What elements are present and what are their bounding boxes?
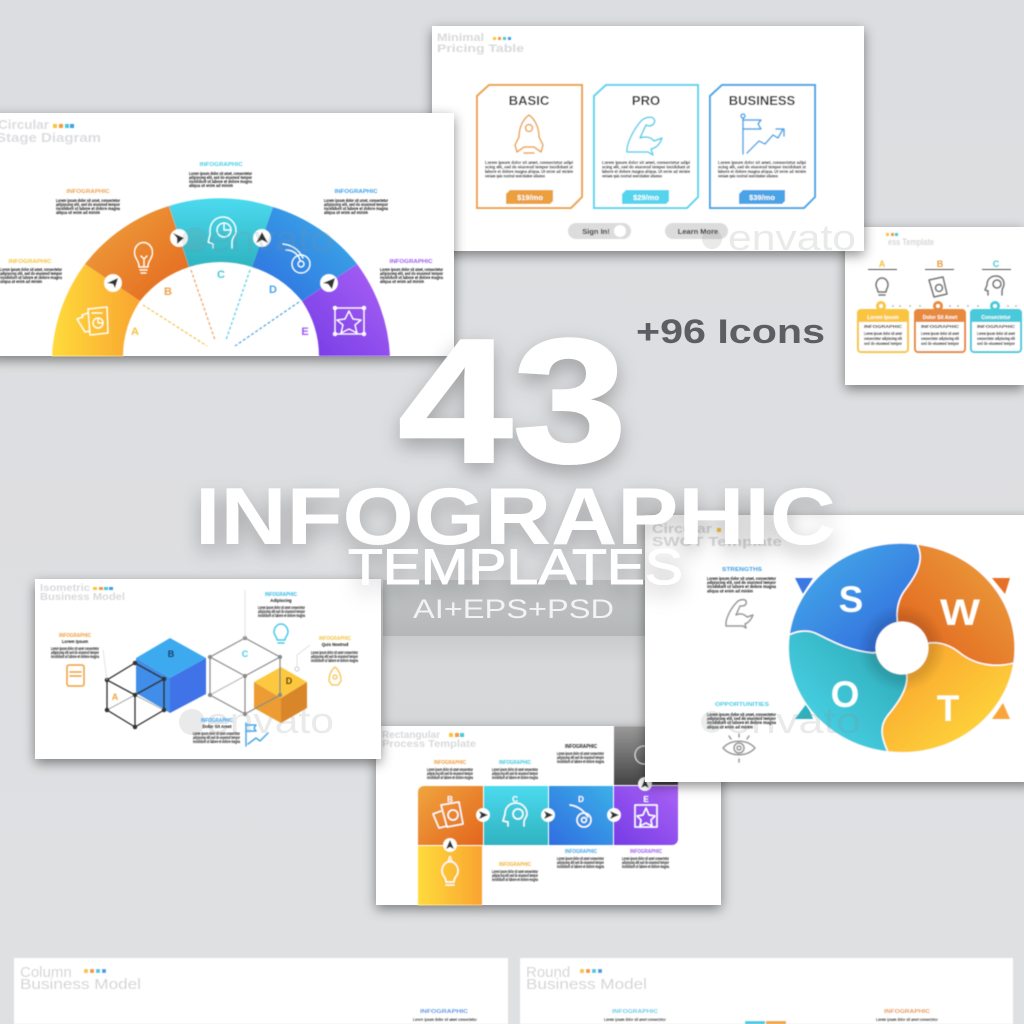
callout: bottom: incididunt ut labore et dolore magna	[193, 739, 240, 744]
text: stage A: incididunt ut labore et dolore magna	[0, 275, 63, 280]
text: strengths: incididunt ut labore et dolore magna	[707, 584, 777, 589]
callout: left: INFOGRAPHIC	[59, 633, 91, 639]
text: stage E: incididunt ut labore et dolore magna	[380, 275, 444, 280]
text: stage C: adipiscing elit, sed do eiusmod tempor	[189, 175, 252, 180]
stage letters: A	[131, 326, 139, 338]
icon: eye	[723, 734, 755, 762]
callout: bottom	[193, 718, 268, 746]
text: process labels: incididunt ut labore et dolore magna	[492, 877, 538, 882]
text: process labels: adipiscing elit sed do eiusmod tempor	[492, 873, 538, 878]
callout: right: incididunt ut labore et dolore magna	[311, 658, 358, 663]
cube letters: C	[242, 649, 249, 659]
label: +96 icons: +96 Icons	[636, 313, 825, 351]
text: stage B: adipiscing elit, sed do eiusmod tempor	[56, 202, 120, 207]
stage letters: C	[217, 269, 225, 281]
text: opportunities: aliqua ut enim ad minim	[707, 724, 753, 730]
process cell B	[418, 786, 483, 845]
arrow markers	[104, 229, 338, 292]
callout: left: Lorem ipsum dolor sit amet consectetur	[51, 646, 99, 651]
text: stage D: INFOGRAPHIC	[334, 189, 378, 195]
text: process labels: Lorem ipsum dolor sit amet consectetur	[557, 751, 604, 756]
column A: Lorem ipsum dolor sit amet	[864, 331, 902, 336]
cube letters: B	[168, 649, 175, 659]
button: sign in	[568, 223, 631, 239]
watermark: envato: envato	[728, 217, 856, 258]
callout: right: Quis Nostrud	[322, 642, 349, 647]
text: process labels: adipiscing elit sed do eiusmod tempor	[557, 755, 604, 760]
text: strengths: Lorem ipsum dolor sit amet, consectetur	[707, 576, 776, 581]
callout: right	[295, 636, 358, 685]
panel: column business model	[14, 958, 508, 1024]
column B: Lorem ipsum dolor sit amet	[921, 331, 959, 336]
process cell E: E	[643, 795, 649, 804]
card: basic: Lorem ipsum dolor sit amet, consectetur adipi	[485, 160, 573, 165]
card: basic: BASIC	[509, 93, 550, 108]
card: pro	[594, 85, 698, 208]
text: stage D: incididunt ut labore et dolore magna	[324, 206, 389, 211]
text: process labels: Lorem ipsum dolor sit amet consectetur	[622, 856, 669, 861]
heading: swot	[652, 521, 782, 549]
text: process labels: incididunt ut labore et dolore magna	[492, 775, 538, 780]
text: strengths: adipiscing elit, sed do eiusmod tempor	[707, 580, 776, 585]
panel: circular SWOT template	[645, 515, 1024, 782]
process cell C: C	[512, 795, 518, 804]
card: business: BUSINESS	[729, 93, 796, 108]
heading: rectangular process	[382, 730, 476, 750]
callout: top: Adipiscing	[270, 598, 292, 603]
callout: top: INFOGRAPHIC	[265, 592, 297, 598]
callout: bottom: adipiscing elit sed do eiusmod tempor	[193, 735, 240, 740]
heading: rectangular process: Rectangular	[382, 730, 440, 741]
text: process labels: Lorem ipsum dolor sit amet consectetur	[492, 869, 538, 874]
watermark: envato: envato	[206, 700, 334, 741]
heading: isometric: Business Model	[40, 592, 125, 603]
heading: pricing: Minimal	[437, 32, 484, 44]
SWOT letters: S	[839, 579, 863, 620]
number: 43: 43	[398, 302, 627, 500]
callout: top: Lorem ipsum dolor sit amet consectetur	[258, 605, 305, 610]
column C: Consectetur	[981, 315, 1011, 321]
heading: templates: TEMPLATES	[348, 539, 683, 595]
text: process labels: Lorem ipsum dolor sit amet consectetur	[427, 767, 473, 772]
column B	[915, 259, 965, 352]
text: stage D: Lorem ipsum dolor sit amet, consectetur	[324, 198, 388, 203]
chart top fragment	[745, 1021, 786, 1024]
text: process labels: adipiscing elit sed do eiusmod tempor	[427, 771, 473, 776]
label: infographic teal: INFOGRAPHIC	[612, 1009, 658, 1015]
text: stage C: aliqua ut enim ad minim	[189, 183, 233, 188]
text: stage A: Lorem ipsum dolor sit amet, consectetur	[0, 267, 62, 272]
column B: consectetur adipiscing elit	[921, 336, 959, 341]
segment A	[52, 264, 140, 356]
price tag: $39/mo	[749, 193, 775, 202]
subheading: formats: AI+EPS+PSD	[413, 594, 614, 624]
column A: INFOGRAPHIC	[864, 324, 902, 329]
stage chart: half ring	[52, 198, 390, 356]
card: pro: labore et dolore magna aliqua. Ut enim ad minim	[602, 169, 690, 174]
text: process labels: adipiscing elit sed do eiusmod tempor	[557, 860, 604, 865]
panel: circular stage diagram	[0, 113, 454, 356]
segment B	[85, 206, 189, 301]
centre hole	[876, 622, 928, 674]
text: process labels: INFOGRAPHIC	[499, 760, 531, 766]
watermark: envato: envato	[726, 700, 861, 741]
column C: C	[993, 259, 1000, 269]
label: infographic	[413, 1009, 477, 1022]
text: stage E	[380, 259, 444, 284]
arrow markers	[443, 777, 652, 852]
text: stage B: incididunt ut labore et dolore magna	[56, 206, 121, 211]
text: opportunities: incididunt ut labore et dolore magna	[707, 720, 777, 725]
card: business: Lorem ipsum dolor sit amet, consectetur adipi	[718, 160, 806, 165]
icon: bulb	[274, 624, 288, 643]
icon: star in frame	[334, 306, 366, 336]
icon: comet	[570, 805, 591, 827]
panel: round business model	[520, 958, 1013, 1024]
icon: head	[985, 276, 1004, 295]
cube B: solid blue	[136, 638, 206, 713]
process cell D	[549, 786, 613, 845]
column A: consectetur adipiscing elit	[864, 336, 902, 341]
heading: round business model	[526, 964, 647, 993]
icon: documents	[929, 277, 947, 297]
button: learn more	[665, 223, 728, 239]
card: business	[710, 85, 815, 208]
watermark: envato	[179, 700, 334, 741]
text: process labels: Lorem ipsum dolor sit amet consectetur	[492, 767, 538, 772]
segment T	[882, 643, 1014, 753]
process cell A: A	[447, 855, 453, 864]
text: stage B: aliqua ut enim ad minim	[56, 210, 100, 215]
icon: rocket	[329, 667, 341, 685]
text: process labels: incididunt ut labore et dolore magna	[427, 775, 473, 780]
panel: process template	[845, 227, 1024, 385]
icon: flag and growth	[246, 723, 268, 746]
text: strengths: STRENGTHS	[722, 567, 763, 573]
column A: Lorem Ipsum	[867, 315, 899, 321]
text: process labels: INFOGRAPHIC	[630, 849, 662, 855]
triangle accents	[795, 578, 1010, 719]
icon: muscle arm	[627, 117, 662, 155]
icon: star	[635, 805, 657, 827]
icon: document	[67, 665, 84, 686]
label: infographic orange: Lorem ipsum dolor sit amet consectetur	[876, 1017, 938, 1022]
stage letters: E	[301, 326, 309, 338]
heading: pricing: Pricing Table	[437, 43, 524, 55]
heading: isometric: Isometric	[40, 583, 90, 594]
heading: pricing	[437, 32, 524, 55]
connector dots	[892, 305, 1017, 307]
text: stage C: INFOGRAPHIC	[200, 162, 243, 168]
heading: infographic: INFOGRAPHIC	[195, 472, 836, 562]
callout: left: incididunt ut labore et dolore magna	[51, 654, 99, 659]
button: sign in: Sign In!	[582, 227, 610, 236]
callout: bottom: Lorem ipsum dolor sit amet consectetur	[193, 731, 240, 736]
heading: circular stage	[0, 117, 101, 145]
cube C: wireframe	[208, 636, 282, 716]
label: infographic orange	[876, 1009, 938, 1022]
callout: right: INFOGRAPHIC	[319, 636, 351, 642]
panel: isometric business model	[35, 579, 381, 759]
text: process labels: incididunt ut labore et dolore magna	[557, 864, 604, 869]
text: stage C	[189, 162, 253, 188]
callout: top: adipiscing elit sed do eiusmod tempor	[258, 609, 305, 614]
process cell C	[484, 786, 548, 845]
text: opportunities: adipiscing elit, sed do eiusmod tempor	[707, 716, 776, 721]
text: process labels: adipiscing elit sed do eiusmod tempor	[492, 771, 538, 776]
column B: INFOGRAPHIC	[921, 324, 959, 329]
card: business: scing elit, sed do eiusmod tempor incididunt ut	[718, 164, 807, 170]
column C	[971, 259, 1021, 352]
text: process labels	[427, 744, 669, 882]
text: process labels: INFOGRAPHIC	[565, 849, 597, 855]
text: process labels: INFOGRAPHIC	[565, 744, 597, 750]
text: stage A: INFOGRAPHIC	[8, 259, 52, 265]
text: process labels: adipiscing elit sed do eiusmod tempor	[622, 860, 669, 865]
card: basic	[477, 85, 582, 208]
process cell A	[418, 846, 482, 905]
callout: left: Lorem Ipsum	[62, 639, 88, 644]
text: process labels: incididunt ut labore et dolore magna	[557, 759, 604, 764]
text: process labels: Lorem ipsum dolor sit amet consectetur	[557, 856, 604, 861]
text: stage C: incididunt ut labore et dolore magna	[189, 179, 253, 184]
text: process labels: INFOGRAPHIC	[499, 862, 531, 868]
cube D: solid orange	[254, 667, 307, 723]
heading: process template: ess Template	[888, 237, 934, 247]
icon: flag and growth arrow	[741, 114, 784, 154]
label: infographic orange: INFOGRAPHIC	[884, 1009, 930, 1015]
icon: head	[503, 803, 527, 826]
SWOT letters	[831, 579, 980, 729]
callout: left	[51, 633, 107, 686]
segment W	[897, 544, 1015, 665]
process cell E	[614, 786, 678, 845]
text: opportunities: Lorem ipsum dolor sit amet, consectetur	[707, 712, 776, 717]
heading: round business model: Business Model	[526, 976, 647, 993]
card: pro: Lorem ipsum dolor sit amet, consectetur adipi	[602, 160, 690, 165]
heading: column business model	[20, 964, 141, 993]
SWOT wheel	[788, 543, 1015, 753]
column C: sed do eiusmod tempor	[977, 341, 1015, 346]
icon: bulb	[442, 862, 458, 885]
text: process labels: incididunt ut labore et dolore magna	[622, 864, 669, 869]
icon: documents	[433, 802, 463, 828]
icon: rocket	[515, 115, 543, 153]
column A: A	[879, 259, 886, 269]
label: infographic: INFOGRAPHIC	[420, 1009, 468, 1015]
segment S	[789, 543, 920, 653]
segment D	[252, 207, 357, 301]
text: stage B	[56, 189, 121, 215]
callout: right: Lorem ipsum dolor sit amet consectetur	[311, 650, 358, 655]
dashed guides	[143, 270, 299, 346]
stage letters	[131, 269, 309, 338]
price tag: $29/mo	[633, 193, 659, 202]
label: infographic teal: Lorem ipsum dolor sit amet consectetur	[604, 1017, 666, 1022]
callout: bottom: Dolor Sit Amet	[203, 724, 232, 729]
text: stage E: Lorem ipsum dolor sit amet, consectetur	[380, 267, 443, 272]
watermark: envato	[701, 700, 861, 741]
text: stage D: adipiscing elit, sed do eiusmod tempor	[324, 202, 388, 207]
text: stage B: Lorem ipsum dolor sit amet, consectetur	[56, 198, 120, 203]
text: stage E: aliqua ut enim ad minim	[380, 279, 424, 284]
text: stage E: INFOGRAPHIC	[390, 259, 433, 265]
text: stage A: adipiscing elit, sed do eiusmod tempor	[0, 271, 62, 276]
card: basic: scing elit, sed do eiusmod tempor incididunt ut	[485, 164, 574, 170]
icon: bulb	[876, 278, 888, 295]
text: strengths: aliqua ut enim ad minim	[707, 588, 753, 594]
heading: process template	[886, 233, 934, 247]
segment C	[169, 198, 273, 267]
heading: round business model: Round	[526, 964, 570, 981]
callout: bottom: INFOGRAPHIC	[201, 718, 233, 724]
icon: comet	[283, 244, 310, 273]
card: pro: PRO	[632, 93, 660, 108]
heading: column business model: Business Model	[20, 976, 141, 993]
callout: left: adipiscing elit sed do eiusmod tempor	[51, 650, 99, 655]
column A: sed do eiusmod tempor	[864, 341, 902, 346]
text: strengths	[707, 567, 777, 594]
SWOT letters: O	[831, 674, 859, 715]
card: basic: veniam quis nostrud exercitation ullamco	[485, 174, 545, 178]
card: pro: scing elit, sed do eiusmod tempor incididunt ut	[602, 164, 691, 170]
text: opportunities	[707, 702, 777, 730]
heading: isometric	[40, 583, 125, 603]
process cell D: D	[578, 795, 584, 804]
process cell B: B	[447, 795, 453, 804]
card: business: labore et dolore magna aliqua. Ut enim ad minim	[718, 169, 806, 174]
column C: INFOGRAPHIC	[977, 324, 1015, 329]
text: stage B: INFOGRAPHIC	[66, 189, 110, 195]
panel: rectangular process template	[376, 726, 721, 905]
heading: swot: Circular	[652, 521, 712, 536]
icon: light bulb	[134, 242, 152, 273]
inner shade	[858, 604, 946, 692]
callout: right: adipiscing elit sed do eiusmod tempor	[311, 654, 358, 659]
card: pro: veniam quis nostrud exercitation ullamco	[602, 174, 662, 178]
cube letters	[112, 649, 293, 702]
card: basic: labore et dolore magna aliqua. Ut enim ad minim	[485, 169, 573, 174]
heading: swot: SWOT Template	[652, 534, 782, 549]
grey cell	[614, 726, 678, 785]
text: stage D	[324, 189, 389, 215]
text: stage A: aliqua ut enim ad minim	[0, 279, 42, 284]
text: stage A	[0, 259, 63, 284]
callout: top	[245, 590, 305, 643]
text: opportunities: OPPORTUNITIES	[715, 702, 770, 708]
cube letters: D	[286, 676, 293, 686]
heading: rectangular process: Process Template	[382, 739, 476, 750]
price tag: $19/mo	[517, 193, 543, 202]
button: learn more: Learn More	[678, 227, 718, 236]
band behind AI+EPS+PSD	[383, 580, 647, 728]
card: business: veniam quis nostrud exercitation ullamco	[718, 174, 778, 178]
heading: column business model: Column	[20, 964, 72, 981]
SWOT letters: W	[940, 592, 980, 633]
column B: Dolor Sit Amet	[923, 315, 958, 321]
stage letters: B	[164, 286, 172, 298]
SWOT letters: T	[937, 688, 960, 729]
stage letters: D	[269, 284, 277, 296]
callout: top: incididunt ut labore et dolore magna	[258, 613, 305, 618]
label: infographic teal	[604, 1009, 666, 1022]
text: stage D: aliqua ut enim ad minim	[324, 210, 368, 215]
cube letters: A	[112, 692, 119, 702]
panel: minimal pricing table	[432, 26, 864, 258]
column B: sed do eiusmod tempor	[921, 341, 959, 346]
text: stage E: adipiscing elit, sed do eiusmod tempor	[380, 271, 443, 276]
icon: muscle arm	[726, 600, 753, 628]
label: infographic: Lorem ipsum dolor sit amet consectetur	[413, 1017, 477, 1022]
icon: documents	[77, 307, 108, 335]
text: process labels: INFOGRAPHIC	[434, 760, 466, 766]
cube A: wireframe	[105, 661, 166, 729]
text: stage C: Lorem ipsum dolor sit amet, consectetur	[189, 171, 252, 176]
column B: B	[937, 259, 944, 269]
segment O	[788, 631, 907, 752]
segment E	[302, 264, 390, 356]
watermark: envato: envato	[208, 218, 333, 259]
icon: head with chart	[208, 217, 236, 248]
column A	[858, 259, 908, 352]
